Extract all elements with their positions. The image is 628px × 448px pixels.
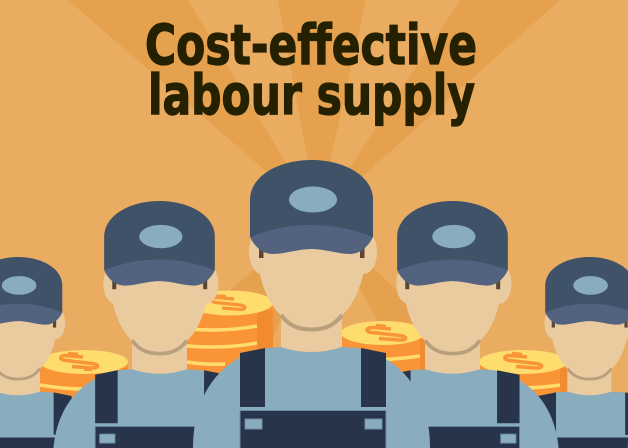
coin stack: centre right [340,321,425,393]
icon: dollar sign [505,354,542,368]
worker: far left [0,257,103,448]
worker: centre front [193,160,430,448]
worker: middle right [346,201,559,448]
title [145,13,477,127]
title: labour supply [148,63,475,127]
coin stack: back left [40,350,128,422]
worker: far right [504,257,628,448]
icon: dollar sign [61,354,98,370]
worker: middle left [53,201,266,448]
sunburst rays [68,0,560,430]
icon: dollar sign [367,326,406,340]
coin stack: back right [479,350,567,422]
coin stack: tall centre left [187,290,273,383]
title: Cost-effective [145,13,477,77]
icon: dollar sign [212,296,245,310]
